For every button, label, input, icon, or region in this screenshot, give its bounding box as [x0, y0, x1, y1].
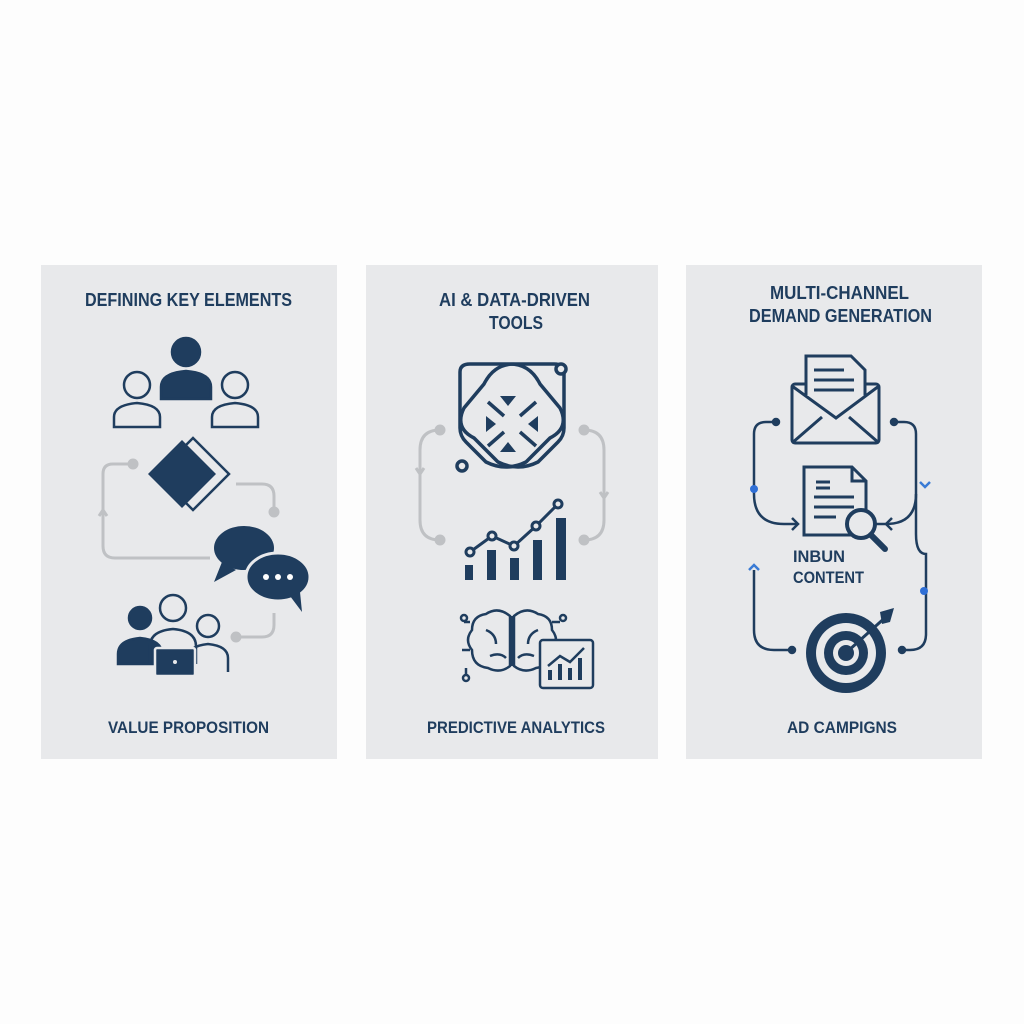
- connector arrows and dots: [749, 419, 930, 653]
- icon: diamond layers: [148, 438, 229, 510]
- cycle connector lines: [99, 460, 278, 641]
- icon: brain with chart: [461, 610, 593, 688]
- icon: bar chart with trend: [465, 500, 566, 580]
- label: ad campigns: AD CAMPIGNS: [787, 718, 897, 737]
- heading: defining key elements: DEFINING KEY ELEMENTS: [85, 290, 292, 310]
- label: predictive analytics: PREDICTIVE ANALYTICS: [427, 718, 605, 737]
- icon: chat bubbles: [214, 526, 310, 612]
- label: inbun content: [793, 547, 865, 587]
- label: value proposition: VALUE PROPOSITION: [108, 718, 269, 737]
- icon: document with magnifier: [804, 467, 885, 549]
- label: inbun content: CONTENT: [793, 568, 865, 587]
- heading: multi-channel demand generation: [749, 283, 932, 326]
- icon: three people: [114, 338, 258, 427]
- icon: envelope: [792, 356, 879, 443]
- icon: team with laptop: [118, 595, 228, 676]
- heading: ai & data-driven tools: TOOLS: [489, 313, 543, 333]
- panel: ai and data-driven tools: [366, 265, 658, 759]
- cycle connector lines: [416, 426, 608, 544]
- heading: multi-channel demand generation: DEMAND GENERATION: [749, 306, 932, 326]
- icon: knot network: [457, 364, 566, 471]
- icon: target with arrow: [806, 608, 894, 693]
- heading: multi-channel demand generation: MULTI-CHANNEL: [770, 283, 909, 303]
- panel: defining key elements: [41, 265, 337, 759]
- panel: multi-channel demand generation: [686, 265, 982, 759]
- label: inbun content: INBUN: [793, 547, 845, 566]
- heading: ai & data-driven tools: AI & DATA-DRIVEN: [439, 290, 590, 310]
- heading: ai & data-driven tools: [439, 290, 590, 333]
